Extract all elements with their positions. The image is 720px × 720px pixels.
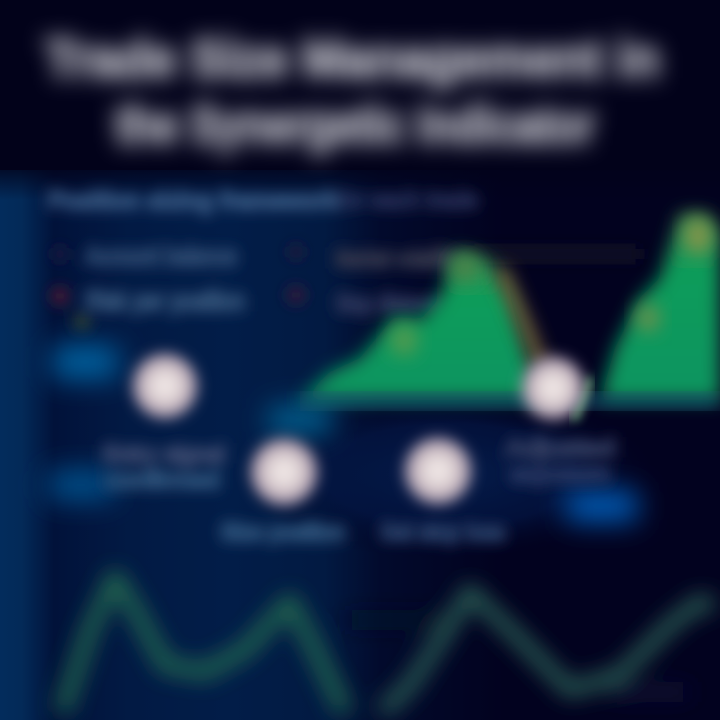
panel: left bullet list [51,240,245,331]
title [45,29,660,155]
node labels: exposure [510,461,610,488]
panel: left bullet list: Risk per position [85,285,245,316]
node labels: Set stop loss [380,519,505,546]
node labels: confirmed [105,467,220,494]
blue highlights [48,345,638,522]
node labels [103,435,615,546]
process nodes [132,353,585,506]
panel: left bullet list: Account balance [85,240,237,271]
panel: right bullet list: Stop distance [335,288,445,318]
subheading: Position sizing framework [48,185,338,215]
node labels: Entry signal [103,441,225,468]
chart: lower line [62,578,714,712]
node labels: Adjusted [505,435,615,462]
panel: right bullet list: Market volatility [335,243,460,273]
node labels: Size position [220,519,345,546]
title: the Synergetic Indicator [115,95,595,155]
panel: right bullet list [287,243,640,318]
title: Trade Size Management in [45,29,660,89]
chart: green area [215,214,720,420]
subheading: for each trade [338,187,478,214]
